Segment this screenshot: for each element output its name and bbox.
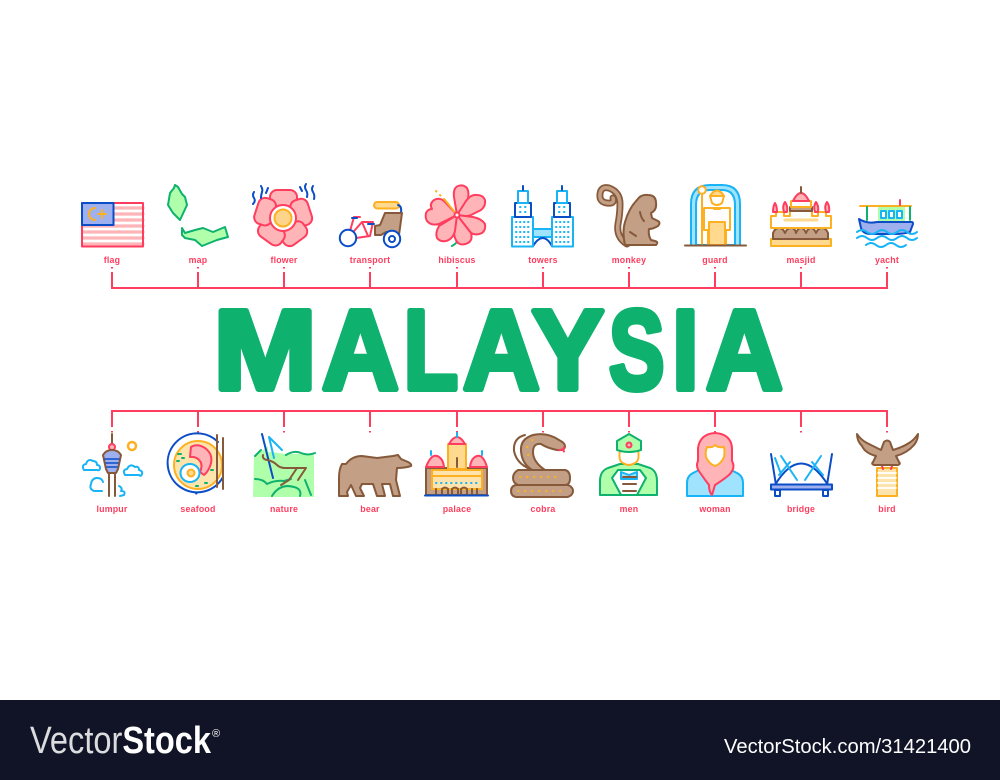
label: men: men xyxy=(620,504,638,514)
label: lumpur: lumpur xyxy=(96,504,128,514)
icon: seafood xyxy=(168,433,223,494)
icon: yacht xyxy=(857,200,917,247)
title: M xyxy=(214,288,317,414)
top connector xyxy=(112,267,887,288)
icon: bear xyxy=(339,455,411,496)
title: A xyxy=(463,288,540,414)
title: A xyxy=(322,288,399,414)
label: woman: woman xyxy=(698,504,731,514)
registered mark: ® xyxy=(212,728,220,740)
icon: lumpur tower xyxy=(83,434,142,496)
label: flower: flower xyxy=(270,255,298,265)
icon: monkey xyxy=(600,188,660,245)
icon: men xyxy=(600,434,657,495)
icon: hibiscus xyxy=(426,185,485,246)
label: seafood: seafood xyxy=(180,504,216,514)
icon: palace xyxy=(425,433,488,496)
label: bridge: bridge xyxy=(787,504,815,514)
icon: nature xyxy=(253,434,315,497)
label: cobra: cobra xyxy=(531,504,555,514)
icon: bridge xyxy=(771,454,832,496)
icon: map xyxy=(168,185,228,246)
label: guard: guard xyxy=(702,255,728,265)
icon: towers xyxy=(512,186,573,246)
footer logo: VectorStock xyxy=(30,720,212,762)
icon: flag xyxy=(82,203,143,246)
title: Y xyxy=(532,288,604,414)
icon: woman xyxy=(687,433,743,496)
label: masjid: masjid xyxy=(786,255,816,265)
label: flag: flag xyxy=(104,255,120,265)
icon: flower xyxy=(252,184,314,249)
label: palace: palace xyxy=(443,504,471,514)
icon: transport xyxy=(340,202,402,247)
label: bear: bear xyxy=(360,504,380,514)
footer band xyxy=(0,700,1000,780)
icon: masjid xyxy=(771,187,831,246)
title: A xyxy=(706,288,783,414)
title: L xyxy=(404,287,458,413)
icon: bird xyxy=(857,434,918,496)
icon: cobra xyxy=(511,434,573,497)
label: nature: nature xyxy=(270,504,298,514)
label: towers: towers xyxy=(528,255,558,265)
bottom connector xyxy=(112,411,887,432)
label: yacht: yacht xyxy=(875,255,899,265)
label: bird: bird xyxy=(878,504,896,514)
title: I xyxy=(672,288,698,414)
label: monkey: monkey xyxy=(612,255,646,265)
title xyxy=(214,287,783,414)
label: map: map xyxy=(189,255,208,265)
title: S xyxy=(609,288,664,414)
footer id: VectorStock.com/31421400 xyxy=(724,736,971,758)
icon: guard xyxy=(685,185,746,246)
label: hibiscus: hibiscus xyxy=(438,255,476,265)
label: transport: transport xyxy=(350,255,390,265)
